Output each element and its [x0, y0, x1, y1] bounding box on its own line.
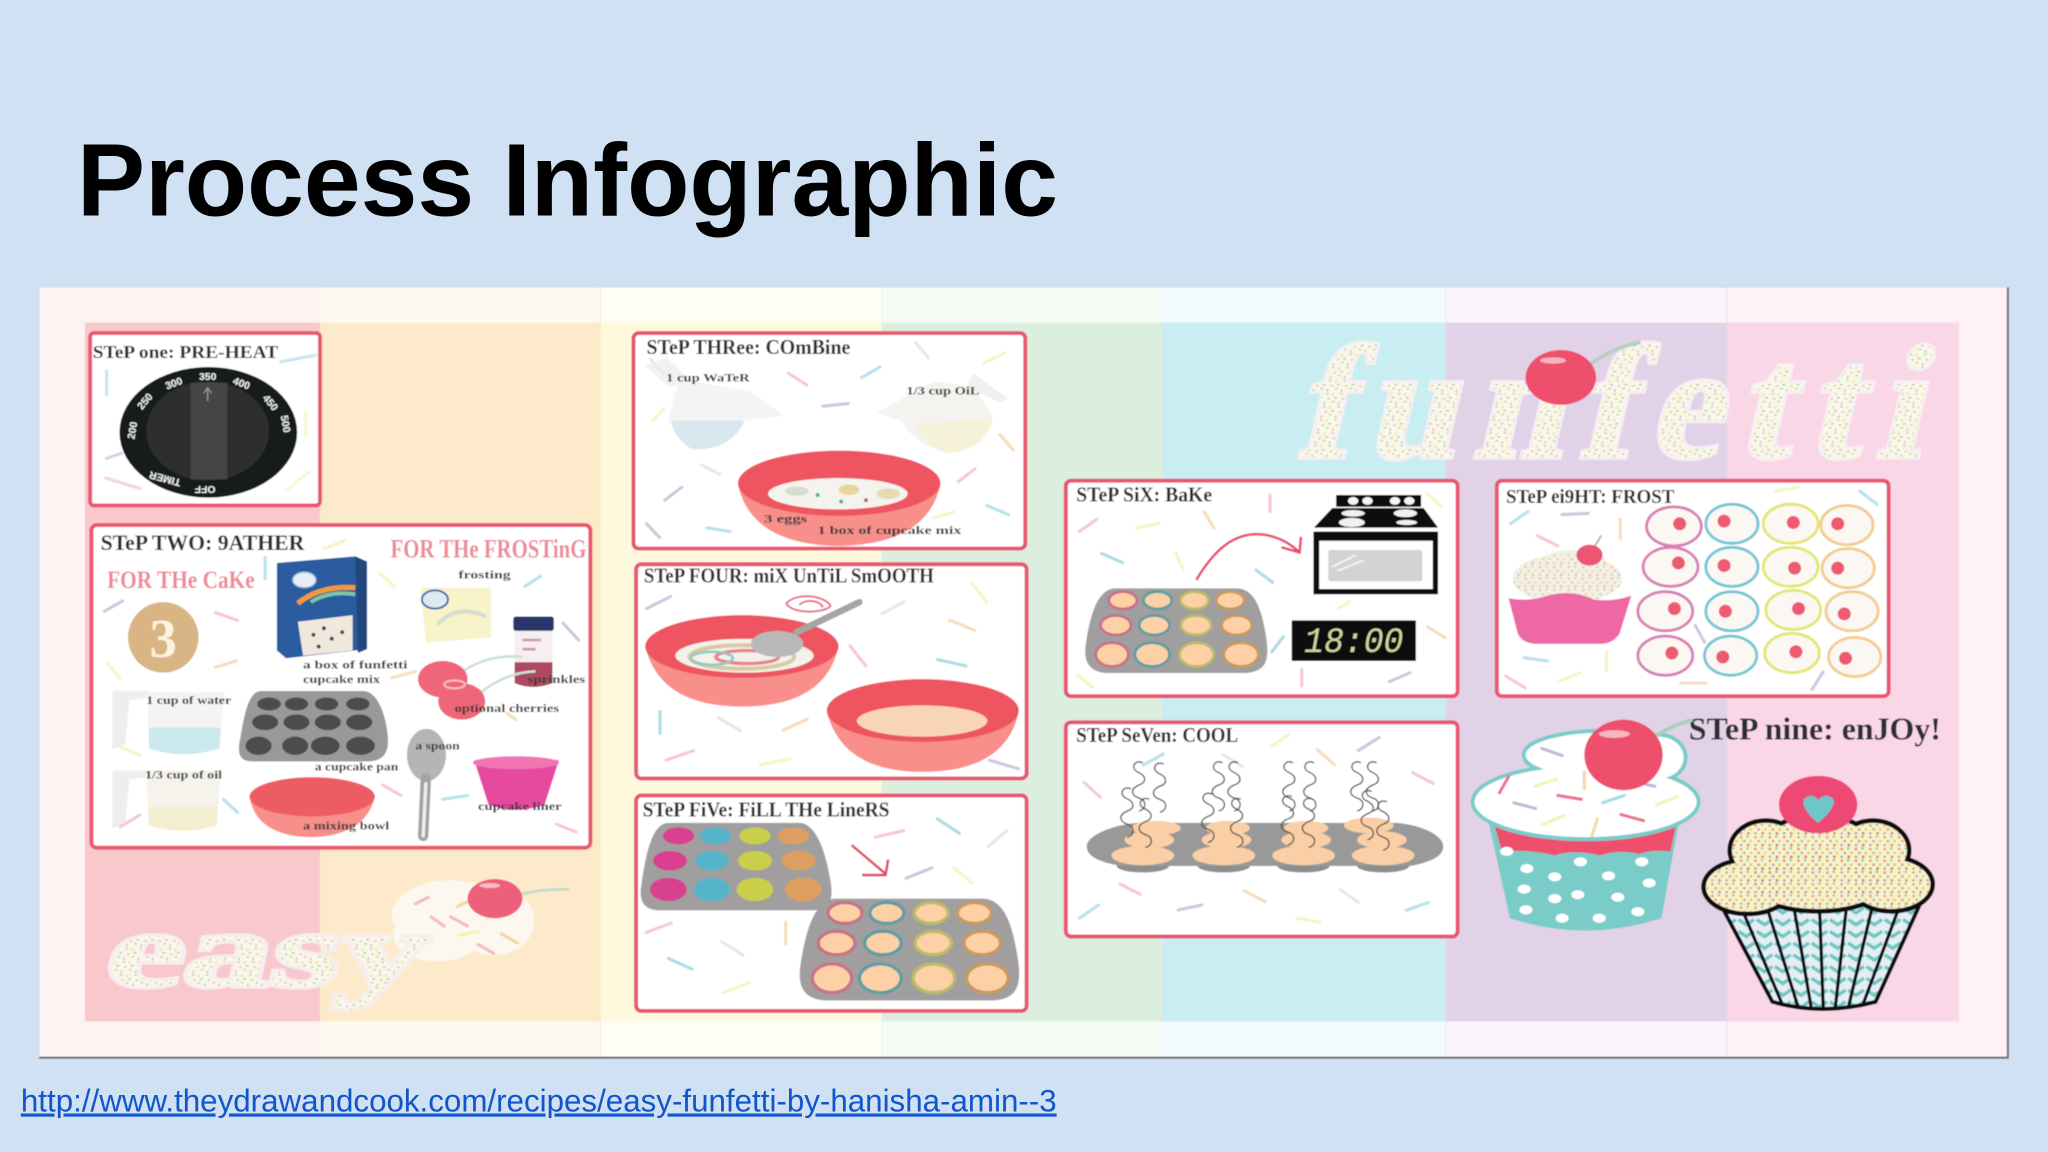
label: cupcake pan: a cupcake pan	[315, 762, 398, 774]
icon: oven dial: 200	[126, 421, 140, 440]
icon: teal polka-dot cupcake	[1475, 720, 1697, 931]
icon: bowl with ingredients	[738, 451, 940, 546]
icon: smooth batter bowl	[827, 679, 1019, 772]
panel: step one	[90, 333, 320, 505]
word: easy: easy	[97, 891, 442, 1010]
sprinkles	[646, 819, 1007, 993]
heading: step two: STeP TWO: 9ATHER	[101, 530, 305, 555]
label: third cup oil: 1/3 cup OiL	[906, 385, 980, 397]
panel: step three	[633, 333, 1025, 549]
label: box of funfetti: a box of funfetti	[303, 660, 408, 672]
cherry on funfetti	[1526, 342, 1640, 405]
icon: oven dial: OFF	[195, 483, 215, 494]
subheading: for the cake: FOR THe CaKe	[107, 567, 255, 594]
icon: oven	[1313, 495, 1438, 594]
panel: step four	[636, 564, 1027, 778]
heading: step six: STeP SiX: BaKe	[1076, 483, 1212, 507]
coloured stripes	[85, 323, 1959, 1021]
icon: timer display: 18:00	[1304, 623, 1403, 663]
label: spoon: a spoon	[415, 741, 460, 753]
icon: pan filled with batter	[800, 899, 1019, 1000]
panel: step seven	[1066, 722, 1458, 936]
icon: cherries	[418, 656, 536, 720]
label: mixing bowl: a mixing bowl	[303, 820, 389, 832]
icon: sprinkled cupcake with heart	[1706, 776, 1930, 1010]
heading: step five: STeP FiVe: FiLL THe LineRS	[643, 797, 889, 821]
label: three eggs: 3 eggs	[764, 513, 808, 525]
icon: cooling tray	[1087, 762, 1443, 872]
decoration: cloud and cherry	[392, 879, 569, 961]
icon: oven dial: 400	[231, 376, 251, 392]
icon: oven dial: 350	[199, 372, 217, 383]
label: cup of water: 1 cup of water	[146, 695, 231, 707]
icon: frosted cupcake grid	[1638, 504, 1881, 677]
icon: oven dial: 500	[278, 415, 292, 434]
word: funfetti: funfetti	[1287, 314, 1953, 493]
title: Process Infographic	[77, 123, 1058, 238]
icon: oven dial: 300	[164, 376, 184, 392]
arrow: to filled pan	[852, 845, 888, 875]
sprinkles	[104, 541, 579, 832]
arrow: into oven	[1196, 534, 1301, 580]
icon: oven dial: 450	[260, 393, 280, 414]
icon: frosted cupcake	[1509, 536, 1631, 644]
icon: three eggs badge	[128, 602, 199, 673]
icon: frosting can	[421, 588, 491, 643]
icon: bowl being mixed	[645, 596, 859, 707]
infographic image	[39, 287, 2009, 1059]
icon: sprinkles jar	[513, 616, 554, 687]
heading: step eight: STeP ei9HT: FROST	[1506, 487, 1674, 508]
icon: oil cup pouring	[876, 374, 1008, 453]
panel: step five	[636, 795, 1027, 1011]
panel: step two	[91, 525, 590, 848]
icon: pan with liners	[641, 823, 832, 910]
icon: cupcake liner	[473, 756, 559, 810]
icon: oil measuring cup	[112, 771, 221, 831]
icon: oven dial: TIMER	[148, 468, 182, 487]
heading: step seven: STeP SeVen: COOL	[1076, 723, 1238, 747]
sprinkles	[647, 342, 1013, 537]
icon: oven dial	[120, 367, 297, 498]
label: box of cupcake mix: 1 box of cupcake mix	[818, 525, 962, 537]
icon: oven dial: 250	[136, 392, 156, 412]
label: frosting: frosting	[458, 570, 511, 582]
icon: cupcake pan	[239, 691, 388, 761]
icon: water measuring cup	[112, 691, 225, 754]
sprinkles	[1506, 487, 1877, 690]
icon: water cup pouring	[645, 358, 784, 449]
heading: step nine: STeP nine: enJOy!	[1689, 711, 1941, 746]
sprinkles	[1079, 735, 1433, 922]
source link: http://www.theydrawandcook.com/recipes/easy-funfetti-by-hanisha-amin--3	[21, 1084, 1057, 1119]
heading: step three: STeP THRee: COmBine	[647, 335, 850, 359]
panel: step six	[1066, 481, 1458, 696]
icon: spoon	[407, 729, 446, 836]
sprinkles	[106, 355, 316, 491]
icon: three eggs badge: 3	[150, 608, 177, 669]
icon: muffin pan	[1085, 588, 1267, 673]
label: cupcake mix: cupcake mix	[303, 674, 381, 686]
image frame	[39, 287, 2009, 1059]
panel: step eight	[1497, 481, 1889, 696]
label: optional cherries: optional cherries	[455, 703, 560, 715]
heading: step four: STeP FOUR: miX UnTiL SmOOTH	[644, 564, 934, 588]
subheading: for the frosting: FOR THe FROSTinG	[391, 535, 586, 564]
label: one cup water: 1 cup WaTeR	[666, 372, 751, 384]
sprinkles	[1077, 493, 1445, 687]
label: cupcake liner: cupcake liner	[478, 801, 562, 813]
label: cup of oil: 1/3 cup of oil	[145, 769, 222, 781]
heading: step one: STeP one: PRE-HEAT	[93, 342, 278, 362]
icon: mixing bowl	[249, 777, 375, 837]
label: sprinkles: sprinkles	[528, 674, 586, 686]
icon: cake mix box	[277, 556, 367, 658]
sprinkles	[647, 583, 1018, 769]
